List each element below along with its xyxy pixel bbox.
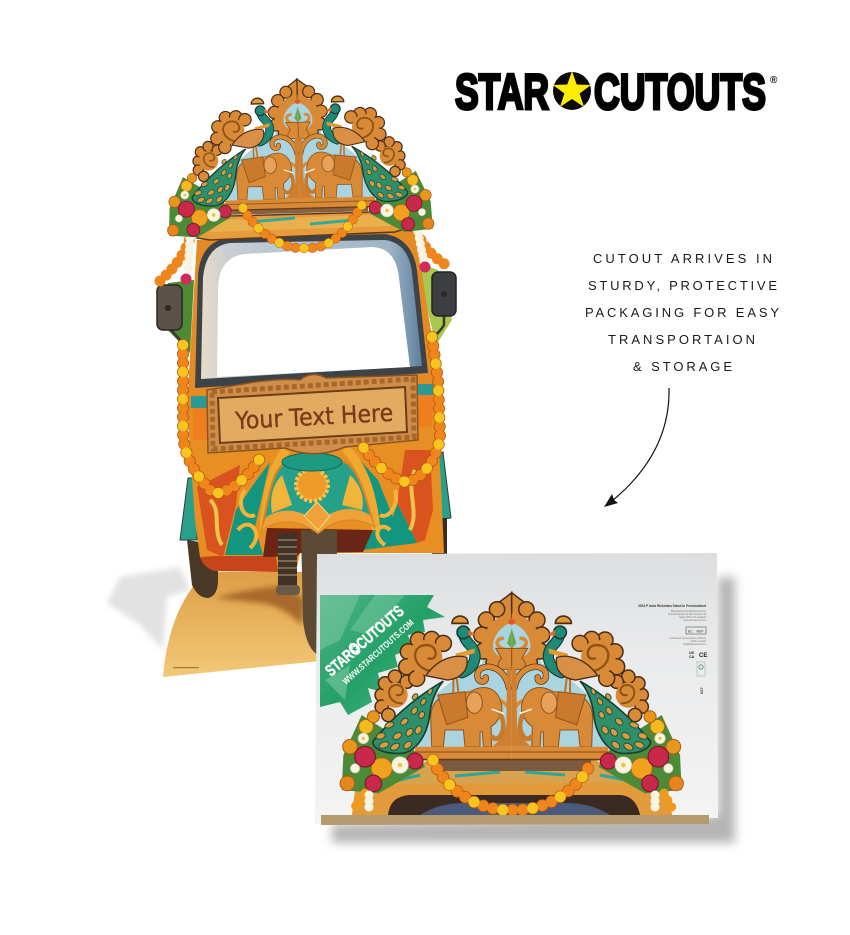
wooden shelf edge — [321, 815, 709, 825]
caption: packaging note — [585, 251, 779, 374]
ground shadow on base — [215, 585, 305, 625]
upper body frame — [186, 230, 438, 415]
caption: packaging note: & STORAGE — [633, 359, 732, 374]
green star label — [320, 595, 445, 715]
body painted panels — [197, 448, 433, 572]
windscreen frame — [195, 234, 428, 388]
cutout: auto rickshaw standee — [157, 76, 456, 677]
UKCA and CE marks: CE — [699, 653, 707, 659]
suspension spring — [276, 533, 300, 595]
small print: 2024 P Auto Rickshaw Stand In Personalised — [638, 604, 706, 608]
package shadow — [332, 577, 735, 843]
EC REP box: REP — [696, 629, 704, 633]
cab roof on package — [352, 759, 672, 815]
wheel arch interior — [263, 528, 373, 557]
sign text: Your Text Here — [234, 399, 394, 435]
side panels: green — [160, 262, 452, 353]
carved crest on package — [340, 593, 683, 793]
small print: United Kingdom by Star Cutouts Ltd — [668, 613, 707, 616]
UKCA and CE marks: UK — [689, 651, 695, 655]
caption: packaging note: CUTOUT ARRIVES IN — [593, 251, 772, 266]
rear view mirrors — [157, 272, 456, 346]
caption: packaging note: STURDY, PROTECTIVE — [588, 278, 777, 293]
base print line — [173, 667, 199, 668]
logo: Star Cutouts: STAR — [455, 64, 549, 120]
package garland — [352, 760, 674, 811]
central mudguard — [262, 453, 374, 533]
small print: info@starcutouts.com — [683, 643, 706, 646]
small print: www.starcutouts.com — [683, 619, 706, 622]
small print — [638, 604, 707, 646]
arrow: caption to package — [604, 388, 669, 507]
windscreen glass edge — [201, 240, 422, 379]
logo: Star Cutouts: CUTOUTS — [594, 64, 766, 120]
caption: packaging note: PACKAGING FOR EASY — [585, 305, 779, 320]
cardboard base — [163, 572, 330, 677]
carved crest — [164, 76, 434, 238]
small print: Manufactured & distributed in the — [671, 610, 707, 613]
small print: Authorised representative address — [670, 637, 707, 640]
package: flat-packed board — [315, 553, 718, 825]
caption: packaging note: TRANSPORTAION — [608, 332, 755, 347]
fenders — [180, 452, 451, 554]
logo: Star Cutouts — [455, 64, 778, 120]
personalised sign — [207, 374, 418, 454]
UKCA and CE marks — [689, 651, 707, 659]
centre tyre — [301, 530, 337, 656]
EC REP box: EC — [688, 629, 693, 633]
roof — [197, 201, 413, 240]
cast shadow of cutout — [107, 567, 190, 650]
EC REP box — [686, 627, 706, 634]
photo hole — [217, 247, 410, 377]
batch number: 027 — [699, 687, 704, 694]
rear left tyre — [187, 540, 218, 598]
roof garland — [243, 203, 363, 248]
tail lights — [191, 384, 433, 440]
green star label: STAR✪CUTOUTS — [322, 603, 408, 680]
marigold garlands on body — [160, 232, 449, 493]
small print: Sales Office UK, England — [679, 616, 707, 619]
recycling icon — [697, 662, 705, 676]
small roses on garland ends — [180, 262, 430, 284]
green star label: WWW.STARCUTOUTS.COM — [341, 617, 416, 686]
logo: Star Cutouts: ® — [770, 75, 778, 86]
UKCA and CE marks: CA — [689, 655, 695, 659]
small print: Dublin, Ireland — [691, 640, 707, 643]
body lower — [186, 400, 444, 572]
